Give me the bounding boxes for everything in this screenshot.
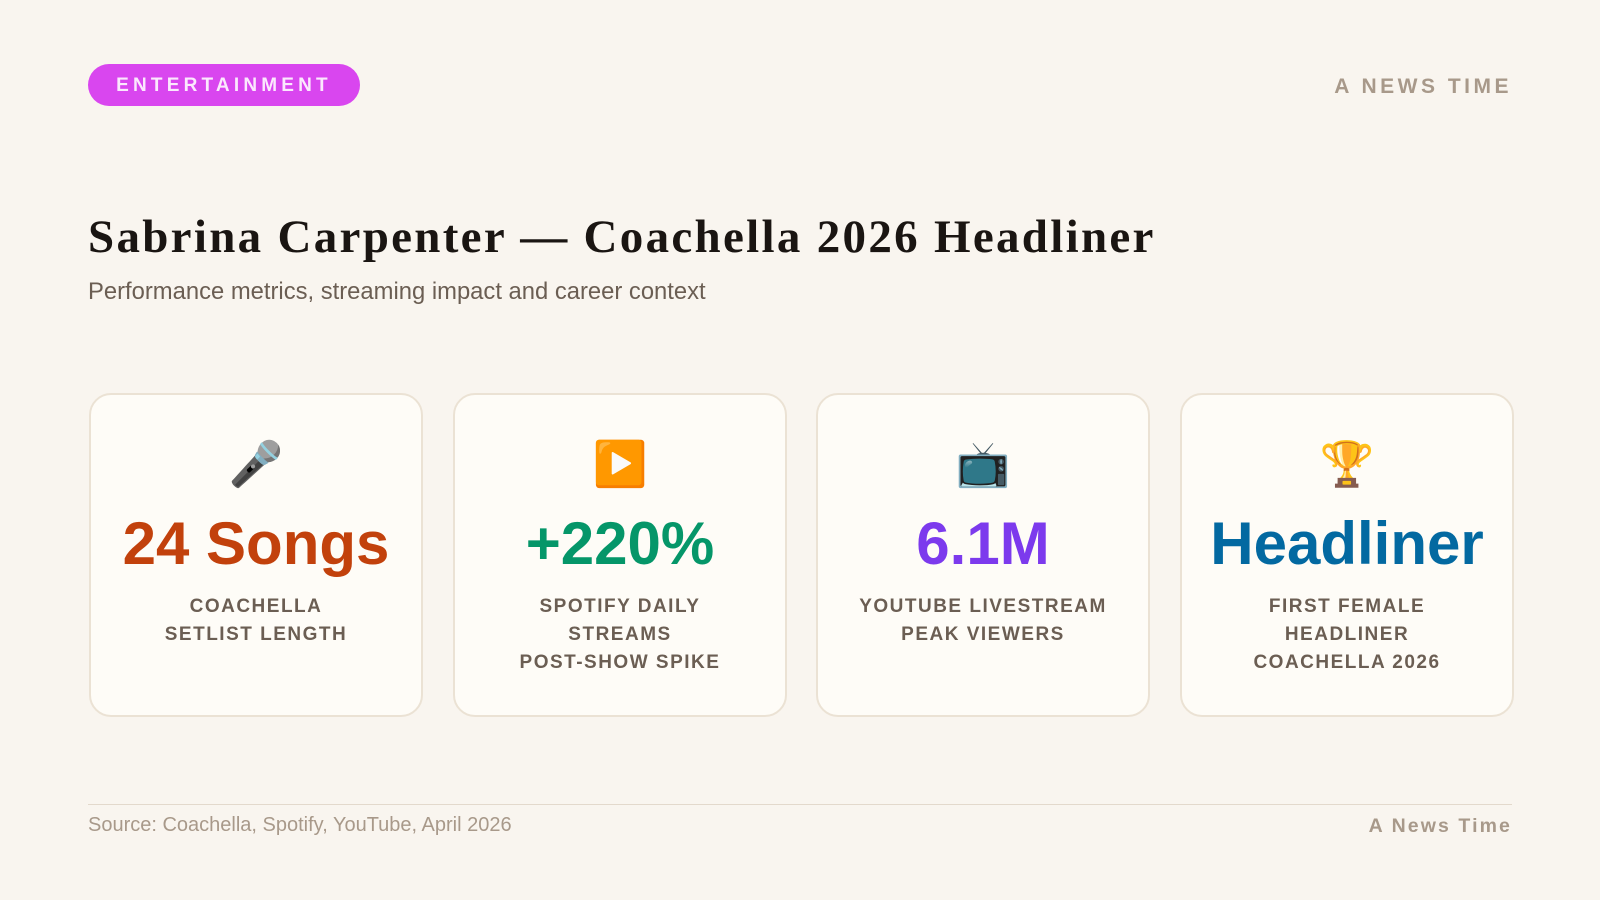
stat: 6.1M: 6.1M	[916, 510, 1050, 577]
icon: trophy: 🏆	[1320, 440, 1374, 489]
label: setlist	[165, 596, 347, 645]
source note: Source: Coachella, Spotify, YouTube, April 2026	[88, 814, 512, 836]
label: headliner: FIRST FEMALE	[1269, 596, 1425, 617]
label: headliner	[1253, 596, 1441, 673]
title: Sabrina Carpenter — Coachella 2026 Headliner	[88, 211, 1156, 263]
card: youtube	[816, 393, 1150, 717]
card: headliner	[1180, 393, 1514, 717]
label: headliner: COACHELLA 2026	[1253, 652, 1441, 673]
brand header: A NEWS TIME	[1334, 75, 1512, 98]
card: setlist	[89, 393, 423, 717]
label: youtube: PEAK VIEWERS	[901, 624, 1065, 645]
icon: microphone: 🎤	[229, 440, 283, 489]
label: headliner: HEADLINER	[1285, 624, 1409, 645]
footer brand: A News Time	[1369, 815, 1512, 837]
label: setlist: COACHELLA	[190, 596, 322, 617]
stat: +220%: +220%	[526, 510, 714, 577]
card: spotify	[453, 393, 787, 717]
category pill	[88, 64, 360, 106]
label: spotify: SPOTIFY DAILY	[540, 596, 700, 617]
icon: tv: 📺	[956, 440, 1010, 489]
subtitle: Performance metrics, streaming impact and career context	[88, 278, 706, 305]
icon: play: ▶️	[593, 440, 647, 489]
stat: 24 songs: 24 Songs	[123, 510, 389, 577]
label: youtube	[859, 596, 1107, 645]
label: youtube: YOUTUBE LIVESTREAM	[859, 596, 1107, 617]
label: spotify: POST-SHOW SPIKE	[520, 652, 720, 673]
label: spotify	[520, 596, 720, 673]
stat: headliner: Headliner	[1210, 510, 1484, 577]
label: spotify: STREAMS	[568, 624, 672, 645]
category pill: ENTERTAINMENT	[116, 75, 332, 96]
label: setlist: SETLIST LENGTH	[165, 624, 347, 645]
